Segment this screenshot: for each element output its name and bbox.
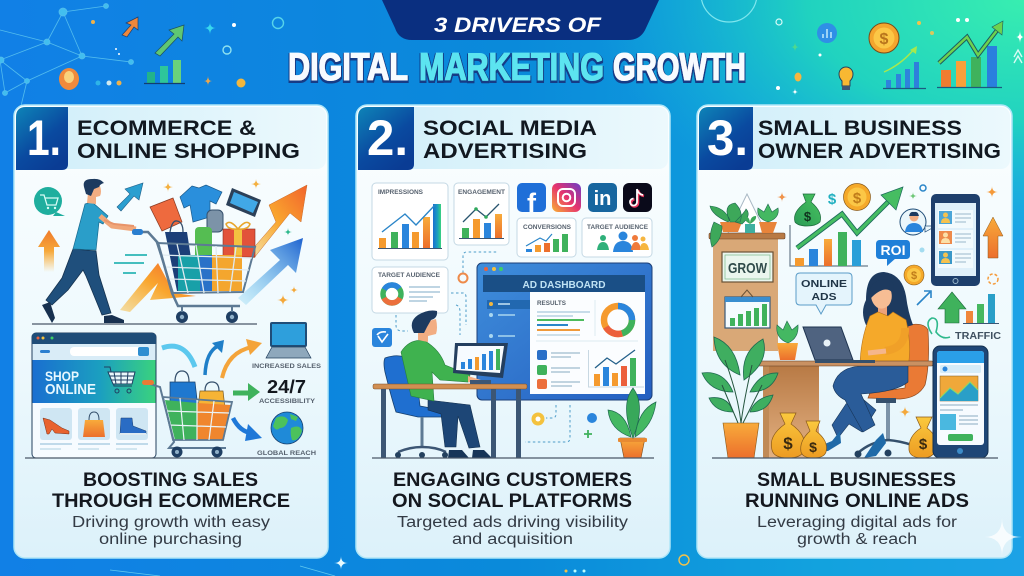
- panel 1 description: Driving growth with easy: [72, 514, 270, 531]
- person at desk: [384, 310, 492, 458]
- money bags: [771, 413, 936, 458]
- number 1 badge: [16, 107, 68, 170]
- panel 2 heading: SOCIAL MEDIA: [423, 117, 597, 140]
- arrows: benefits: [162, 339, 262, 441]
- arrow: orange up right: [983, 217, 1003, 258]
- panel 1 caption: THROUGH ECOMMERCE: [52, 490, 290, 512]
- laptop with chart: [453, 343, 508, 384]
- panel 2 description: [397, 514, 628, 548]
- title line 1: 3 DRIVERS OF: [434, 14, 602, 37]
- shop online label: ONLINE: [45, 382, 96, 398]
- ad dashboard monitor: [477, 263, 652, 400]
- ground line bottom: [25, 457, 310, 459]
- bubble: online ads: [796, 273, 852, 314]
- label: accessibility: ACCESSIBILITY: [259, 398, 316, 405]
- small floating icons: [532, 412, 597, 438]
- card: target audience one: TARGET AUDIENCE: [587, 224, 649, 231]
- shop online label: [45, 368, 96, 398]
- panel 2 caption: ON SOCIAL PLATFORMS: [392, 490, 632, 512]
- arrow: blue small: [117, 183, 143, 211]
- phone with profiles: [931, 194, 980, 286]
- panel 2 description: Targeted ads driving visibility: [397, 514, 628, 531]
- title banner: [382, 0, 659, 40]
- panel: small business owner advertising: [697, 105, 1012, 558]
- sparkles: [163, 179, 298, 306]
- sign: grow: [722, 252, 773, 282]
- label: increased sales: INCREASED SALES: [252, 363, 322, 370]
- dashboard results: [530, 292, 645, 394]
- arrows: large growth arrows: [120, 185, 307, 312]
- small cart icon: [104, 367, 135, 393]
- panel 3 description: [757, 514, 957, 548]
- shelf with plants and frames: [709, 194, 785, 351]
- icon: linkedin: [588, 183, 617, 212]
- money bags: $: [783, 434, 793, 453]
- potted plant: [608, 388, 656, 458]
- bubble: roi: ROI: [880, 242, 906, 258]
- label: global reach: GLOBAL REACH: [257, 450, 316, 457]
- dashboard sidebar: [487, 300, 530, 338]
- panel 3 header strip: [699, 107, 1010, 169]
- product tiles: [40, 408, 148, 449]
- number 2 badge: [358, 107, 414, 170]
- bubble: roi: [876, 240, 910, 266]
- number 1 badge: 1.: [27, 110, 61, 166]
- ground line top: [32, 323, 257, 325]
- icons: dollar and coin: $: [853, 190, 862, 207]
- shopping cart with products: [132, 185, 261, 323]
- card: target audience two: [372, 267, 448, 313]
- panel 2 heading: [423, 117, 597, 163]
- ground line: [372, 457, 654, 459]
- icon: coin: [904, 265, 924, 285]
- torso: [401, 340, 470, 401]
- shopping cart two: [142, 371, 232, 458]
- panel 1 header strip: [16, 107, 326, 169]
- panel 3 heading: OWNER ADVERTISING: [758, 140, 1001, 163]
- card: conversions: CONVERSIONS: [523, 224, 572, 231]
- icon: tiktok: [623, 183, 652, 212]
- decoration dots: [777, 185, 998, 284]
- small desk plant: [777, 321, 798, 360]
- panel 3 description: growth & reach: [797, 531, 917, 548]
- icon: money bag: [794, 194, 821, 226]
- framed chart: [725, 290, 770, 328]
- panel 1 heading: [77, 117, 300, 163]
- icons: traffic growth: [917, 291, 999, 338]
- hair and face: [863, 272, 913, 330]
- desk: [373, 384, 527, 458]
- sign: grow: GROW: [728, 260, 768, 277]
- panel: social media advertising: [356, 105, 670, 558]
- icon: avatar bubble: [900, 209, 936, 235]
- number 3 badge: [699, 107, 753, 170]
- decoration: corner and bottom sparkles: [110, 518, 1022, 576]
- dashboard title bar: [483, 275, 645, 292]
- phone with ad: [933, 346, 988, 458]
- legs: [832, 395, 876, 438]
- icons: right header growth icons: $: [880, 31, 889, 48]
- panel 3 caption: SMALL BUSINESSES: [757, 469, 956, 491]
- dashboard mini chart: [588, 350, 644, 387]
- money bags: $: [919, 436, 928, 453]
- panel 3 heading: SMALL BUSINESS: [758, 117, 962, 140]
- icon: globe: [271, 412, 303, 444]
- dashboard title bar: AD DASHBOARD: [522, 279, 606, 291]
- legs: [428, 400, 480, 448]
- desk: [758, 361, 933, 458]
- icon: linkedin: in: [594, 188, 611, 210]
- card: impressions chart: [372, 183, 448, 260]
- card: engagement chart: [454, 183, 509, 245]
- panel 1 description: [72, 514, 270, 548]
- panel 2 description: and acquisition: [452, 531, 573, 548]
- motion lines: [114, 255, 147, 273]
- bubble: online ads: ONLINE: [801, 278, 847, 290]
- main title: [288, 46, 746, 89]
- panel 3 heading: [758, 117, 1001, 163]
- main title: DIGITAL: [288, 46, 408, 89]
- card: conversions: [517, 218, 576, 257]
- icons: dollar and coin: $: [828, 191, 837, 208]
- money bags: $: [809, 439, 817, 455]
- laptop: [803, 327, 875, 363]
- panel 3 caption: RUNNING ONLINE ADS: [745, 490, 969, 512]
- panel 3 description: Leveraging digital ads for: [757, 514, 957, 531]
- decoration: network nodes left: [0, 4, 134, 110]
- panel 2 caption: [392, 469, 632, 512]
- card: impressions chart: IMPRESSIONS: [378, 189, 424, 196]
- arrow: orange up: [38, 230, 60, 272]
- main title: GROWTH: [613, 46, 746, 89]
- panel: ecommerce and online shopping: [14, 105, 328, 558]
- chair: [854, 324, 929, 458]
- panel 1 heading: ECOMMERCE &: [77, 117, 256, 140]
- number 2 badge: 2.: [367, 110, 408, 166]
- panel 3 caption: [745, 469, 969, 512]
- shop online label: SHOP: [45, 368, 79, 384]
- dashboard campaign rows: [537, 350, 580, 389]
- person pushing cart: [42, 179, 136, 323]
- icon: cart speech bubble: [34, 187, 65, 216]
- panel 2 header strip: [358, 107, 668, 169]
- icon: check badge: [372, 328, 392, 347]
- panel 1 caption: BOOSTING SALES: [83, 469, 258, 491]
- bubble: online ads: ADS: [812, 291, 836, 303]
- icon: instagram: [552, 183, 581, 212]
- dashboard donut: [604, 306, 632, 334]
- main title: MARKETING: [419, 46, 604, 89]
- stat: 24/7: 24/7: [267, 377, 306, 397]
- torso: [860, 312, 910, 368]
- dashed connectors: [396, 252, 570, 442]
- card: engagement chart: ENGAGEMENT: [458, 189, 505, 196]
- icon: coin: $: [911, 270, 917, 282]
- number 3 badge: 3.: [707, 110, 748, 166]
- label: traffic: TRAFFIC: [955, 330, 1001, 342]
- chair: [384, 356, 454, 458]
- bar chart with arrow: [790, 187, 903, 266]
- dashboard results: RESULTS: [537, 300, 567, 307]
- icons: right header growth icons: [701, 0, 1024, 95]
- icon: laptop: [266, 322, 311, 358]
- sparkle: [899, 406, 911, 418]
- panel 2 caption: ENGAGING CUSTOMERS: [393, 469, 632, 491]
- ground line: [712, 457, 998, 459]
- card: target audience one: [582, 218, 652, 257]
- large floor plant: [702, 337, 778, 458]
- icons: left header growth icons: [59, 17, 284, 90]
- icon: facebook: f: [527, 188, 537, 218]
- panel 1 heading: ONLINE SHOPPING: [77, 140, 300, 163]
- icons: dollar and coin: [828, 184, 870, 210]
- icon: money bag: $: [804, 209, 812, 224]
- browser shop online: [32, 333, 156, 458]
- icon: facebook: [517, 183, 546, 218]
- card: target audience two: TARGET AUDIENCE: [378, 272, 441, 279]
- panel 2 heading: ADVERTISING: [423, 140, 587, 163]
- panel 1 description: online purchasing: [99, 531, 242, 548]
- woman at laptop: [810, 272, 929, 458]
- panel 1 caption: [52, 469, 290, 512]
